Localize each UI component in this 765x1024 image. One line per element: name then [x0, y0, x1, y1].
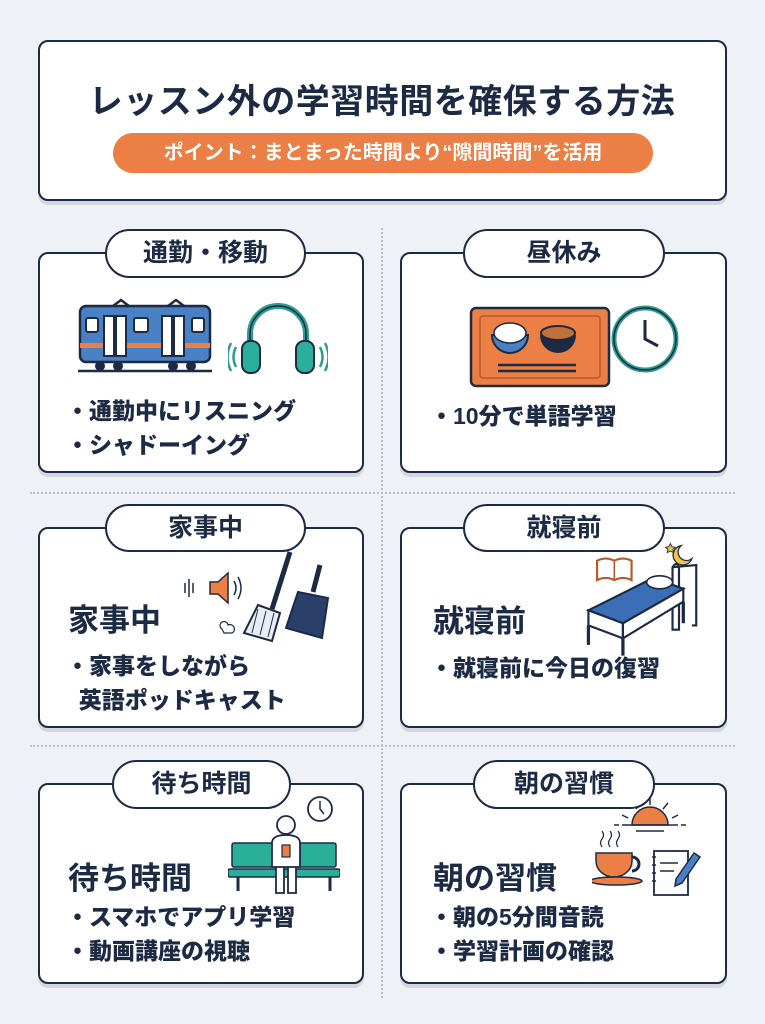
subtitle pill — [113, 133, 653, 173]
subtitle pill: ポイント：まとまった時間より“隙間時間”を活用 — [164, 142, 602, 164]
panel: housework — [38, 527, 364, 728]
label: waiting — [112, 760, 291, 809]
panel: morning — [400, 783, 727, 984]
title: レッスン外の学習時間を確保する方法 — [89, 83, 675, 121]
bullets: ・家事をしながら — [66, 653, 250, 679]
label: commute: 通勤・移動 — [143, 239, 268, 267]
label: commute — [105, 229, 306, 278]
bullets: ・学習計画の確認 — [430, 938, 614, 964]
bullets: ・朝の5分間音読 — [430, 904, 604, 930]
heading: 待ち時間 — [68, 861, 192, 896]
panel: waiting — [38, 783, 364, 984]
label: lunch — [463, 229, 665, 278]
bullets: ・通勤中にリスニング — [66, 398, 296, 424]
label: housework: 家事中 — [168, 514, 243, 542]
bullets — [66, 904, 295, 964]
label: lunch: 昼休み — [526, 239, 602, 267]
heading: 就寝前 — [433, 604, 526, 639]
bullets — [430, 904, 614, 964]
icon: train — [78, 298, 212, 372]
icon: bench person clock — [228, 796, 340, 894]
panel: bedtime — [400, 527, 727, 728]
heading: 家事中 — [68, 603, 161, 638]
label: bedtime: 就寝前 — [526, 514, 602, 542]
bullets — [66, 653, 286, 713]
label: morning: 朝の習慣 — [514, 770, 614, 798]
icon: speaker broom dustpan — [184, 551, 330, 642]
icon: headphones — [228, 303, 328, 374]
icon: clock — [612, 306, 678, 372]
heading: 朝の習慣 — [433, 861, 557, 896]
label: morning — [473, 760, 655, 809]
icon: bed book moon — [586, 542, 698, 656]
bullets: ・動画講座の視聴 — [66, 938, 250, 964]
panel: commute — [38, 252, 364, 473]
bullets — [66, 398, 296, 458]
label: bedtime — [463, 504, 665, 552]
panel: lunch — [400, 252, 727, 473]
bullet: ・10分で単語学習 — [430, 403, 617, 429]
title panel — [38, 40, 727, 201]
icon: sun coffee notebook — [592, 798, 701, 896]
bullets: 英語ポッドキャスト — [79, 687, 286, 713]
bullet: ・就寝前に今日の復習 — [430, 655, 660, 681]
bullets: ・シャドーイング — [66, 432, 250, 458]
label: waiting: 待ち時間 — [151, 770, 252, 798]
bullets: ・スマホでアプリ学習 — [66, 904, 295, 930]
icon: tray — [470, 306, 610, 388]
label: housework — [105, 504, 306, 552]
